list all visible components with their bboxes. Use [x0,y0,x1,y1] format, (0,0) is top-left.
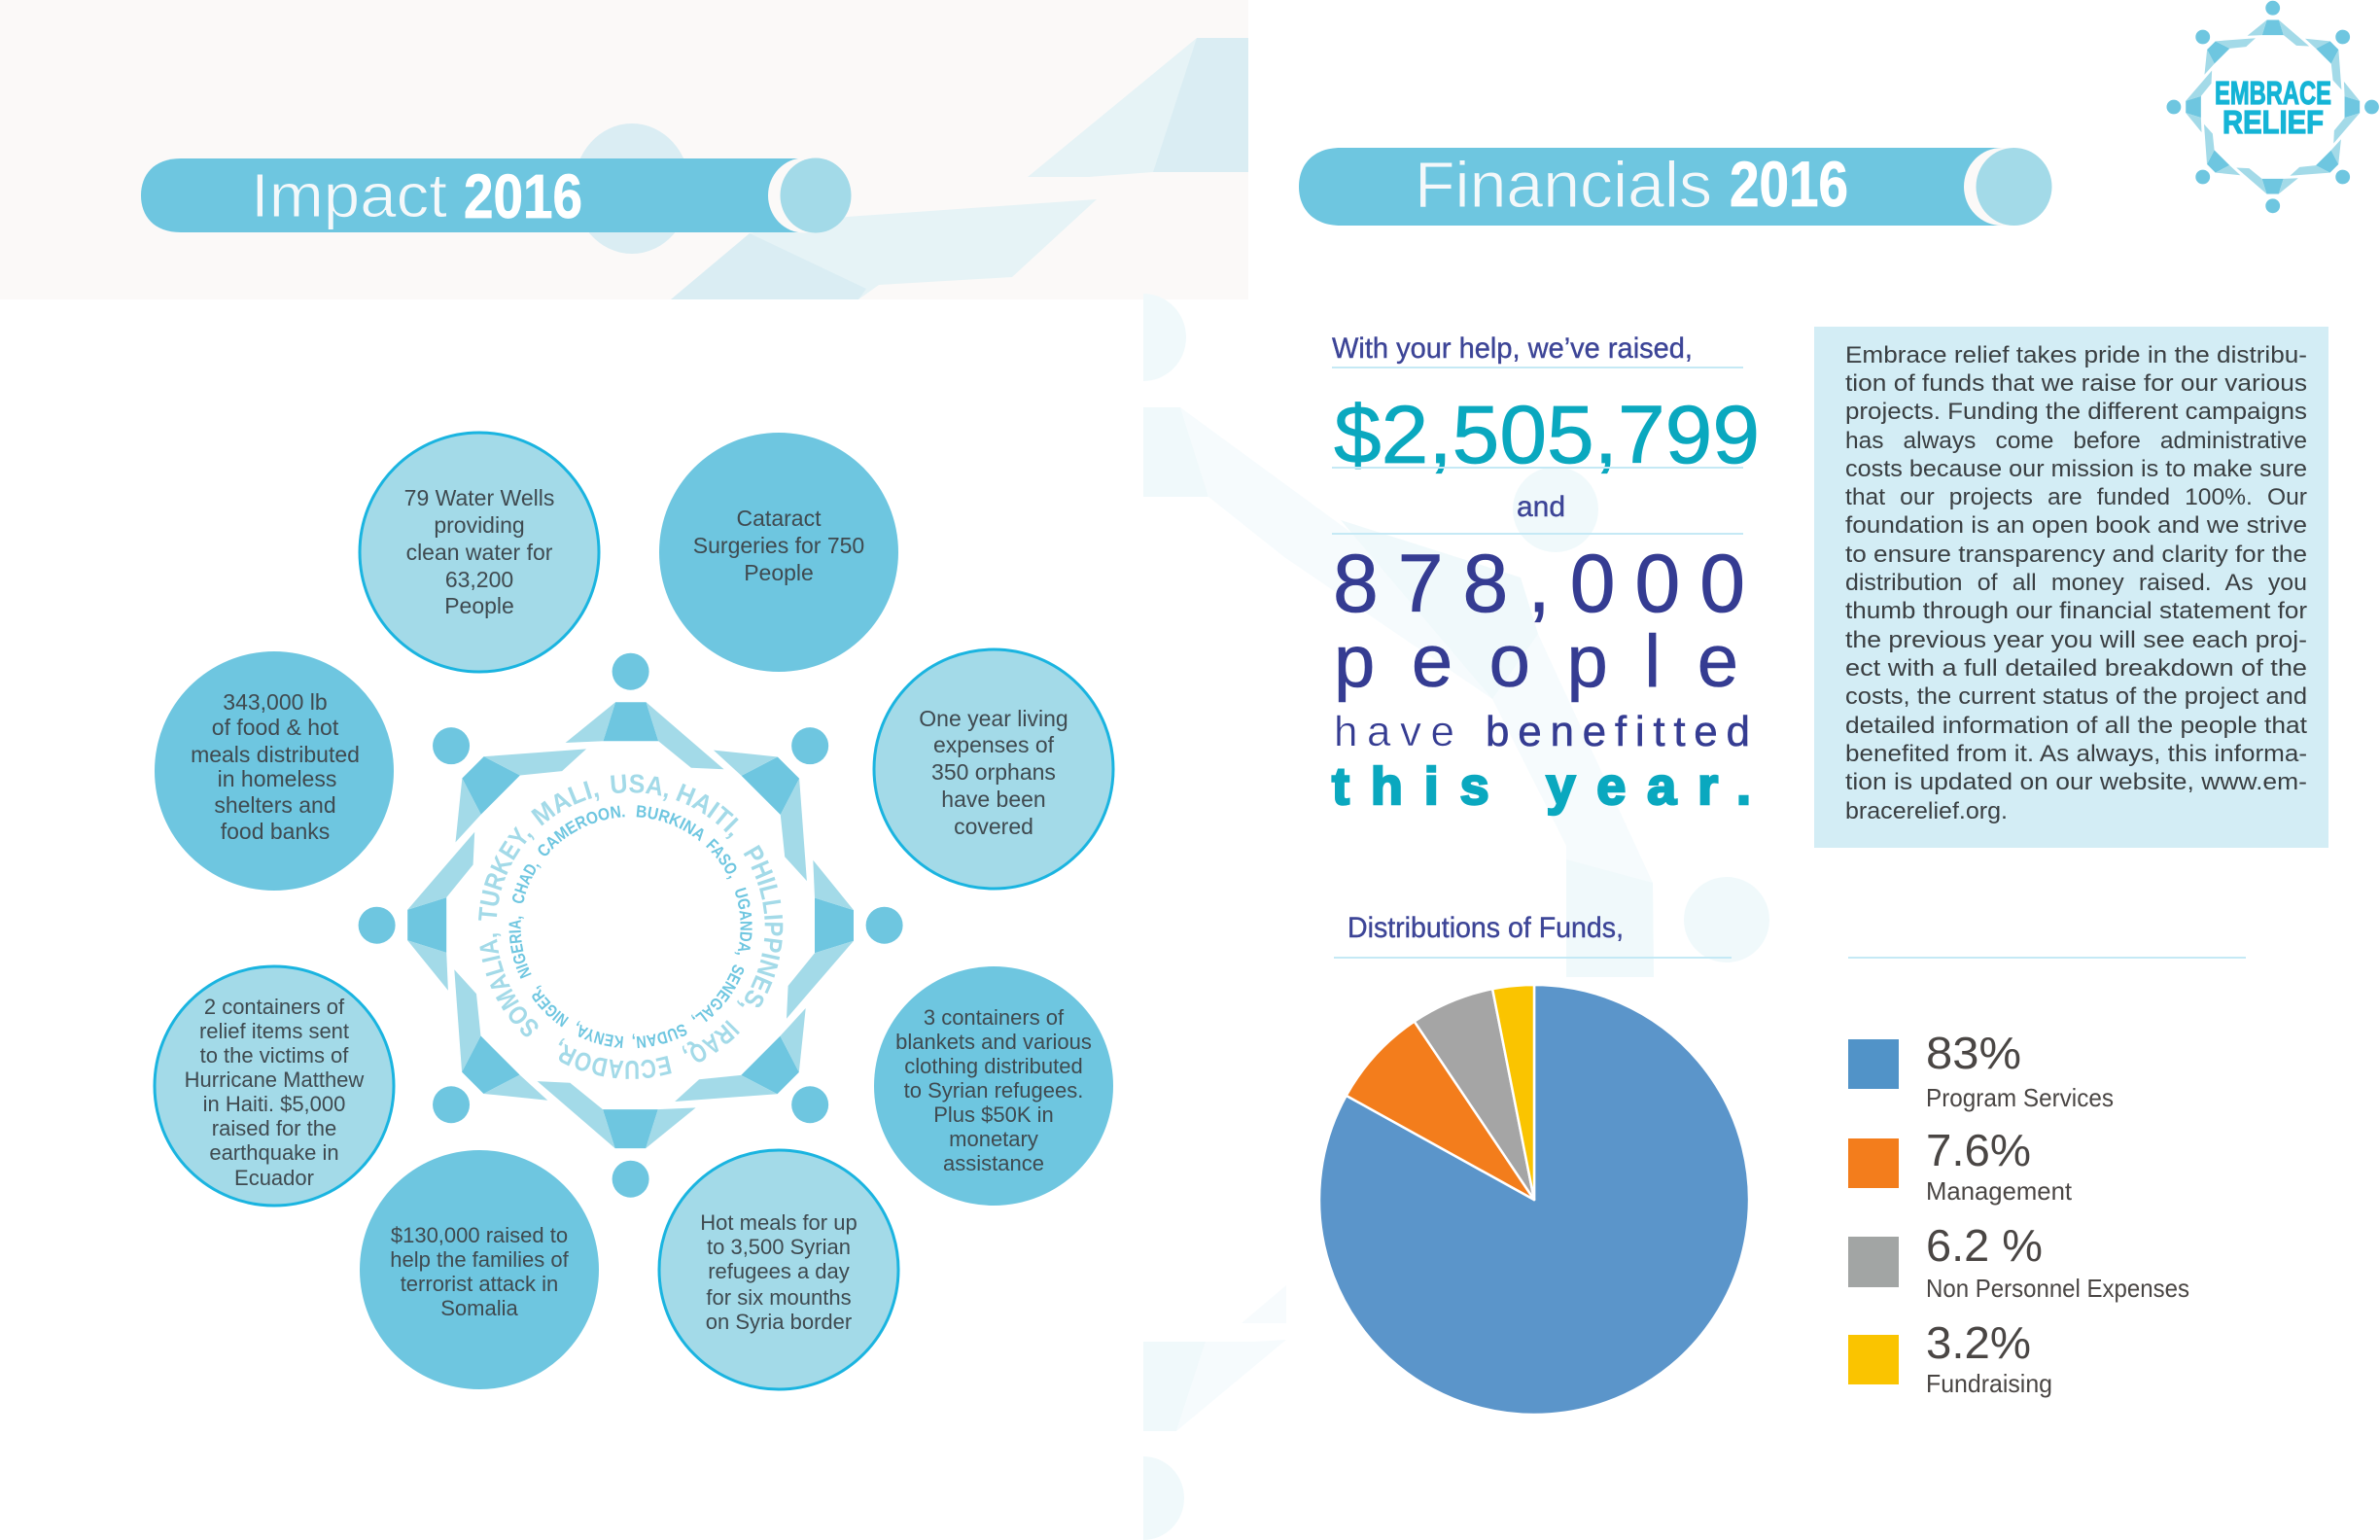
central emblem with countries: TURKEY, [478,826,535,921]
central emblem with countries: IRAQ, [682,1020,740,1062]
impact circle: Hurricane Matthew: Ecuador [234,1166,314,1190]
title bar: Financials 2016 [1299,148,2051,226]
people benefitted statement: have [1334,708,1454,755]
panel: transparency statement: thumb through our financial statement for [1845,598,2307,624]
impact circle: Syrian refugees containers [874,966,1113,1206]
impact circle: Hurricane Matthew: Hurricane Matthew [185,1068,364,1092]
title bar: Impact 2016 [141,158,852,233]
pie chart: distribution of funds [1319,985,1749,1415]
impact circle: orphans [874,649,1113,889]
impact circle: cataract surgeries [659,433,898,672]
central emblem with countries: SUDAN, [632,1025,686,1048]
panel: transparency statement: tion is updated on our website, www.em- [1845,769,2307,795]
legend: management: 7.6% [1926,1125,2031,1175]
legend: non personnel expenses: Non Personnel Expenses [1926,1274,2189,1303]
panel: transparency statement: distribution of all money raised. As you [1845,570,2307,596]
impact circle: cataract surgeries: Cataract [737,506,822,531]
people benefitted statement: this year. [1332,757,1751,816]
central emblem with countries: CHAD, [512,863,542,903]
impact circle: Hurricane Matthew: in Haiti. $5,000 [203,1092,345,1116]
impact circle: Somalia: Somalia [440,1296,519,1320]
impact circle: water wells [360,433,599,672]
central emblem with countries: ECUADOR, [558,1038,672,1079]
impact circle: water wells: providing [434,512,525,538]
central emblem with countries [358,653,903,1198]
impact circle: orphans: expenses of [933,732,1055,757]
impact circle: water wells: 79 Water Wells [404,485,554,510]
raised heading: With your help, we’ve raised, [1332,332,1693,365]
impact circle: water wells: 63,200 [445,567,513,592]
legend: program services [1848,1028,2114,1112]
faint emblem watermark [1143,294,1769,1540]
impact circle: orphans: covered [954,814,1033,839]
impact circle: Syrian refugees containers: Plus $50K in [933,1102,1054,1127]
panel: transparency statement: detailed information of all the people that [1845,713,2307,739]
amount raised: $2,505,799 [1334,389,1760,480]
panel: transparency statement [1814,327,2328,848]
panel: transparency statement: Embrace relief takes pride in the distribu- [1845,342,2307,368]
central emblem with countries: MALI, [531,781,599,826]
impact circle: orphans: have been [941,787,1046,812]
panel: transparency statement: to ensure transparency and clarity for the [1845,542,2307,568]
title bar: Impact 2016: 2016 [464,161,582,231]
impact circle: hot meals: Hot meals for up [700,1210,858,1235]
impact circle: hot meals: for six mounths [706,1285,852,1310]
impact circle: food and hot meals [155,651,394,891]
legend: fundraising [1848,1317,2052,1398]
people benefitted statement [1332,538,1751,816]
impact circle: hot meals: to 3,500 Syrian [707,1235,851,1259]
impact circle: water wells: People [444,593,514,618]
legend: non personnel expenses: 6.2 % [1926,1220,2043,1271]
header band: impact [0,0,1248,299]
distributions heading: Distributions of Funds, [1348,912,1624,944]
central emblem with countries: FASO, [706,838,737,879]
legend: program services: Program Services [1926,1083,2114,1112]
central emblem with countries: SENEGAL, [691,964,745,1023]
legend: fundraising: 3.2% [1926,1317,2031,1368]
panel: transparency statement: projects. Funding the different campaigns [1845,399,2307,425]
impact circle: food and hot meals: food banks [221,819,330,844]
central emblem with countries: KENYA, [576,1021,623,1048]
impact circle: orphans: 350 orphans [931,759,1056,785]
impact circle: food and hot meals: in homeless [218,766,336,791]
impact circle: Syrian refugees containers: to Syrian refugees. [904,1078,1083,1102]
legend: program services: 83% [1926,1028,2021,1078]
legend: management: Management [1926,1176,2073,1206]
and: and [1517,491,1565,523]
panel: transparency statement: foundation is an open book and we strive [1845,512,2307,539]
central emblem with countries: USA, [611,774,668,801]
central emblem with countries: CAMEROON. [539,805,625,856]
people benefitted statement: people [1334,620,1738,703]
panel: transparency statement: costs, the current status of the project and [1845,683,2307,710]
legend: fundraising: Fundraising [1926,1369,2052,1398]
title bar: Impact 2016: Impact [251,160,447,230]
panel: transparency statement: bracerelief.org. [1845,798,2008,824]
impact circle: Syrian refugees containers: monetary [949,1127,1038,1151]
panel: transparency statement: benefited from it. As always, this informa- [1845,741,2307,767]
legend: management [1848,1125,2073,1206]
impact circle: Hurricane Matthew [155,966,394,1206]
impact circle: Hurricane Matthew: 2 containers of [204,995,345,1019]
impact circle: cataract surgeries: Surgeries for 750 [693,533,864,558]
panel: transparency statement: costs because our mission is to make sure [1845,456,2307,482]
panel: transparency statement: tion of funds that we raise for our various [1845,370,2307,397]
people benefitted statement: benefitted [1486,708,1750,755]
central emblem with countries: UGANDA, [735,887,752,955]
central emblem with countries: NIGERIA, [509,916,532,979]
central emblem with countries: NIGER, [532,986,569,1027]
impact circle: Syrian refugees containers: clothing distributed [904,1054,1083,1078]
impact circle: Syrian refugees containers: 3 containers of [924,1005,1065,1030]
panel: transparency statement: the previous year you will see each proj- [1845,627,2307,653]
logo: Embrace Relief [2166,1,2379,213]
impact circle: food and hot meals: 343,000 lb [223,689,328,715]
impact circle: hot meals: on Syria border [706,1310,852,1334]
impact circle: hot meals: refugees a day [708,1259,850,1283]
impact circle: Hurricane Matthew: to the victims of [200,1043,349,1068]
impact circle: Hurricane Matthew: earthquake in [209,1140,339,1165]
impact circle: water wells: clean water for [406,540,553,565]
central emblem with countries: PHILLIPPINES, [737,845,784,1007]
impact circle: Somalia: $130,000 raised to [391,1223,568,1247]
title bar: Financials 2016: 2016 [1730,148,1848,220]
title bar: Financials 2016: Financials [1415,149,1712,222]
impact circle: cataract surgeries: People [744,560,814,585]
central emblem with countries: HAITI, [676,784,739,840]
impact circle: Hurricane Matthew: relief items sent [199,1019,349,1043]
impact circle: Somalia: help the families of [390,1247,570,1272]
impact circle: orphans: One year living [919,706,1068,731]
legend: non personnel expenses [1848,1220,2189,1303]
impact circle: Hurricane Matthew: raised for the [212,1116,336,1140]
impact circle: Somalia: terrorist attack in [401,1272,558,1296]
panel: transparency statement: that our projects are funded 100%. Our [1845,484,2307,510]
impact circle: Syrian refugees containers: assistance [943,1151,1044,1175]
logo: Embrace Relief: RELIEF [2222,104,2324,140]
impact circle: Somalia [360,1150,599,1389]
central emblem with countries: SOMALIA, [480,933,539,1036]
impact circle: food and hot meals: shelters and [214,792,336,818]
impact circle: Syrian refugees containers: blankets and various [895,1030,1092,1054]
central emblem with countries: BURKINA [636,805,704,842]
panel: transparency statement: has always come before administrative [1845,428,2307,454]
logo: Embrace Relief: EMBRACE [2215,75,2331,111]
impact circle: food and hot meals: meals distributed [191,742,360,767]
panel: transparency statement: ect with a full detailed breakdown of the [1845,655,2307,682]
people benefitted statement: 878,000 [1333,538,1745,629]
impact circle: food and hot meals: of food & hot [212,715,339,740]
impact circle: hot meals [659,1150,898,1389]
